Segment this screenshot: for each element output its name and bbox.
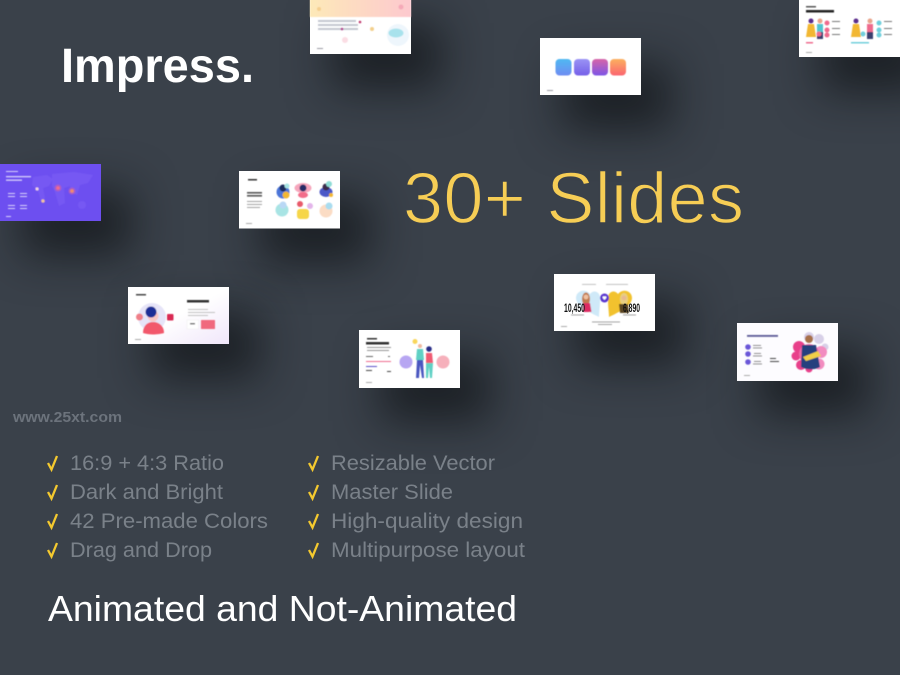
feature list: left column: Drag and Drop (70, 539, 212, 562)
slide: four gradient icons (540, 38, 641, 95)
heading: 30+ Slides: 30+ Slides (403, 159, 744, 239)
slide: six illustrations (239, 171, 340, 228)
stat: 6,890: 6,890 (623, 302, 640, 315)
slide: figures comparison (799, 0, 900, 57)
slide: hearts statistics (554, 274, 655, 331)
feature list: right column: Master Slide (331, 481, 453, 504)
subheading: animated: Animated and Not-Animated (48, 588, 517, 629)
feature list: left column (48, 452, 268, 562)
slide: purple world map (0, 164, 101, 221)
slide: two figures with circles (359, 330, 460, 388)
slide: face mask (310, 0, 411, 54)
watermark: www.25xt.com (12, 409, 122, 426)
stat: 10,450: 10,450 (564, 302, 585, 315)
title: Impress. (61, 40, 254, 93)
feature list: right column (309, 452, 525, 562)
feature list: left column: 42 Pre-made Colors (70, 510, 268, 533)
feature list: left column: 16:9 + 4:3 Ratio (70, 452, 224, 475)
feature list: right column: Resizable Vector (331, 452, 495, 475)
feature list: right column: High-quality design (331, 510, 523, 533)
slide: man with gear (737, 323, 838, 381)
feature list: right column: Multipurpose layout (331, 539, 525, 562)
feature list: left column: Dark and Bright (70, 481, 223, 504)
slide: woman with mask (128, 287, 229, 344)
